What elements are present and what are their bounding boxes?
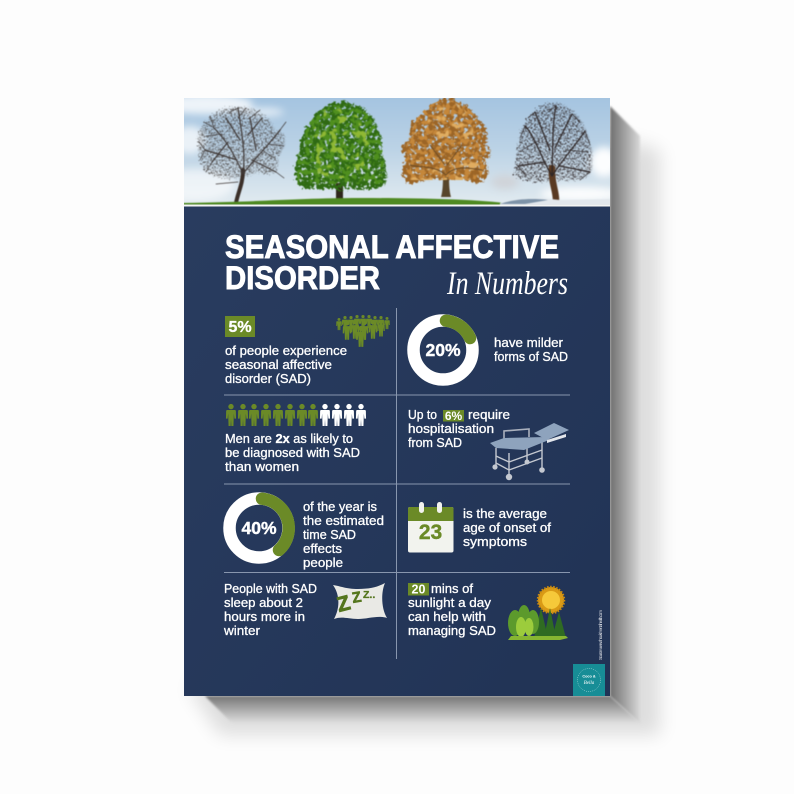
description with 20 badge: 20 xyxy=(412,582,425,596)
description: hours more in xyxy=(224,609,305,624)
description: People with SAD xyxy=(224,581,317,596)
description xyxy=(463,506,551,549)
stat: sleep xyxy=(223,581,387,638)
description: effects xyxy=(303,541,343,556)
grid divider lines xyxy=(224,308,570,659)
stat: men 2x xyxy=(225,404,366,474)
description: time SAD xyxy=(303,527,356,542)
photo banner: four seasons trees xyxy=(184,98,610,207)
description: have milder xyxy=(494,335,564,350)
icon: pillow with zzz: Z xyxy=(351,589,363,607)
description with 6% badge xyxy=(408,407,510,450)
description with 20 badge: managing SAD xyxy=(408,623,496,638)
description: symptoms xyxy=(463,534,528,549)
description: of the year is xyxy=(303,499,377,514)
icon: calendar: 23 xyxy=(419,521,442,544)
stat: 5% of people xyxy=(225,315,390,386)
logo: Coco & Bella: Bella xyxy=(584,681,595,686)
description with 6% badge: from SAD xyxy=(408,435,462,450)
icon row: men and women xyxy=(226,404,366,426)
description with 20 badge xyxy=(408,581,496,638)
stat: 20% have milder forms xyxy=(414,320,568,380)
title xyxy=(225,229,559,296)
logo: Coco & Bella: Coco & xyxy=(582,674,596,678)
donut chart 40%: 40% xyxy=(241,518,277,538)
description: winter xyxy=(223,623,261,638)
title: DISORDER xyxy=(225,260,380,296)
stat: age 23 xyxy=(408,502,551,552)
source note: Source: www.nhs.uk/mentalhealth.com xyxy=(598,610,603,660)
stat: sunlight xyxy=(408,581,568,640)
tree 1: bare winter tree xyxy=(198,107,286,203)
description with 20 badge: sunlight a day xyxy=(408,595,492,610)
donut chart 40% xyxy=(230,498,289,558)
description with 20 badge: mins of xyxy=(431,581,473,596)
icon: hospital bed xyxy=(490,423,569,480)
description: is the average xyxy=(463,506,547,521)
logo: Coco & Bella xyxy=(573,664,605,696)
description: Men are 2x as likely to xyxy=(225,431,353,446)
description: than women xyxy=(225,459,299,474)
description with 6% badge: Up to xyxy=(408,407,437,422)
description: the estimated xyxy=(303,513,384,528)
stat: 40% of the year xyxy=(230,498,384,570)
description: sleep about 2 xyxy=(224,595,303,610)
description: be diagnosed with SAD xyxy=(225,445,360,460)
description xyxy=(494,335,568,364)
description with 6% badge: require xyxy=(468,407,510,422)
description: of people experience xyxy=(225,343,347,358)
description xyxy=(225,343,347,386)
icon: calendar xyxy=(408,502,454,552)
description xyxy=(303,499,384,570)
donut chart 20% xyxy=(414,320,472,380)
5% badge xyxy=(225,316,255,337)
donut chart 20%: 20% xyxy=(425,340,461,360)
tree 3: orange autumn tree xyxy=(402,98,490,197)
description: people xyxy=(303,555,343,570)
5% badge: 5% xyxy=(228,319,252,336)
stat: 6% hospitalisation xyxy=(408,407,569,480)
icon: pillow with zzz: Z xyxy=(335,591,353,617)
description with 6% badge: 6% xyxy=(445,409,463,423)
icon: crowd of people xyxy=(336,315,390,347)
title: SEASONAL AFFECTIVE xyxy=(225,229,559,265)
icon: sun and forest xyxy=(508,587,568,640)
description: seasonal affective xyxy=(225,357,332,372)
tree 4: bare late-winter tree xyxy=(514,103,593,200)
description: forms of SAD xyxy=(494,349,568,364)
description with 6% badge: hospitalisation xyxy=(408,421,494,436)
description xyxy=(223,581,317,638)
description xyxy=(225,431,360,474)
tree 2: green summer tree xyxy=(295,102,387,200)
poster background panel xyxy=(184,98,610,696)
subtitle: In Numbers: In Numbers xyxy=(446,266,568,302)
icon: pillow with zzz xyxy=(333,583,387,619)
description: age of onset of xyxy=(463,520,551,535)
description with 20 badge: can help with xyxy=(408,609,486,624)
poster drop shadow xyxy=(190,106,660,735)
icon: pillow with zzz: Z.. xyxy=(363,589,375,601)
ground: grass and snow xyxy=(180,198,505,205)
description: disorder (SAD) xyxy=(225,371,311,386)
